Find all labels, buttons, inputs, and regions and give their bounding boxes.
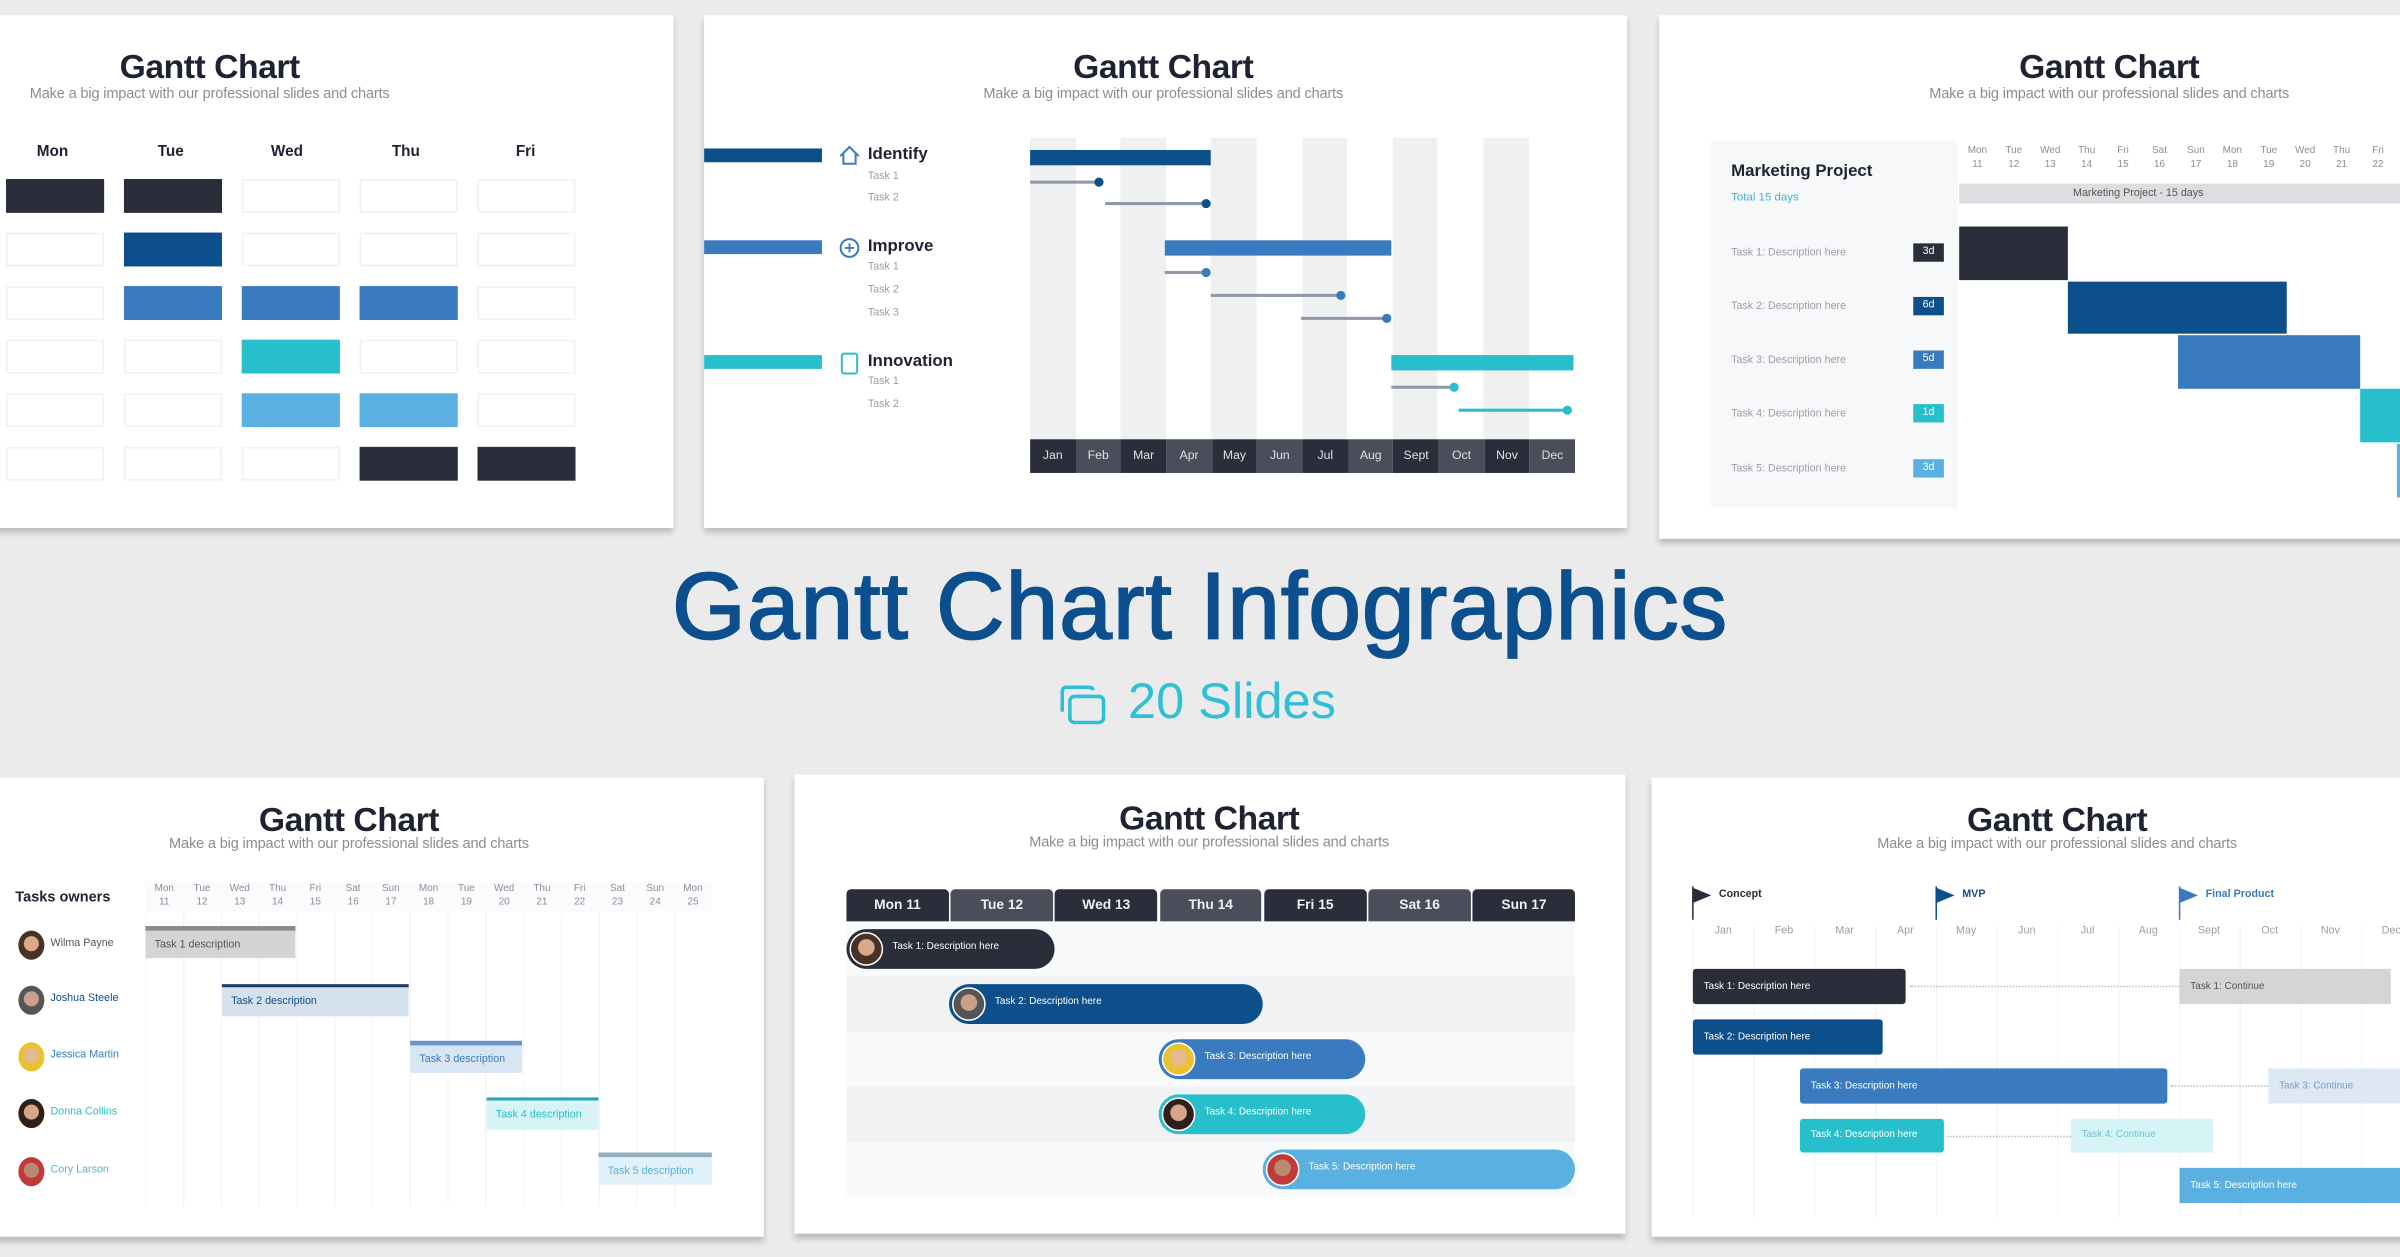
day grid: 12: [2008, 159, 2019, 170]
month axis: Apr: [1180, 448, 1199, 462]
panel: milestone gantt: [1652, 778, 2400, 1237]
timeline grid: 16: [348, 897, 359, 908]
icon: home: [840, 146, 860, 165]
pill bars: Task 5: Description here: [1309, 1162, 1415, 1172]
timeline grid: 21: [536, 897, 547, 908]
timeline grid: Sat: [610, 883, 625, 894]
day tabs: Thu 14: [1189, 897, 1233, 912]
panel: yearly gantt with milestones: [704, 15, 1627, 528]
months and bars: Task 3: Continue: [2279, 1081, 2353, 1091]
month axis: Dec: [1541, 448, 1563, 462]
icon: slides: [1060, 686, 1106, 724]
day tabs: [846, 889, 1575, 922]
timeline grid: Thu: [533, 883, 550, 894]
day grid: 14: [2081, 159, 2092, 170]
timeline grid: Task 3 description: [419, 1055, 505, 1065]
milestone flags: Concept: [1719, 889, 1762, 900]
subtitle: Make a big impact with our professional slides and charts: [169, 836, 529, 853]
pill bars: Task 3: Description here: [1205, 1052, 1311, 1062]
timeline grid: Tue: [458, 883, 475, 894]
day tabs: Fri 15: [1297, 897, 1334, 912]
month axis: Aug: [1360, 448, 1382, 462]
timeline grid: 25: [687, 897, 699, 908]
timeline grid: Fri: [574, 883, 585, 894]
day grid: 19: [2263, 159, 2274, 170]
months and bars: Task 4: Description here: [1811, 1130, 1917, 1140]
panel: marketing project gantt: [1659, 15, 2400, 539]
months and bars: Jun: [2018, 926, 2035, 937]
months and bars: Task 4: Continue: [2082, 1130, 2156, 1140]
owners column: Wilma Payne: [51, 938, 114, 949]
day grid: 13: [2045, 159, 2056, 170]
timeline grid: Wed: [230, 883, 250, 894]
months and bars: Task 3: Description here: [1811, 1081, 1917, 1091]
panel: pill gantt: [794, 774, 1626, 1234]
icon: plus circle: [840, 238, 860, 258]
timeline grid: 22: [574, 897, 585, 908]
day grid: Sun: [2187, 145, 2205, 156]
timeline grid: Sun: [646, 883, 664, 894]
timeline grid: [145, 882, 712, 1206]
timeline grid: 11: [159, 897, 169, 908]
bars: [1030, 150, 1211, 165]
day headers: Wed: [271, 144, 303, 161]
heading: Gantt Chart: [1073, 47, 1253, 86]
day grid: Wed: [2040, 145, 2060, 156]
category labels: Task 1: [868, 171, 899, 182]
day grid: Wed: [2295, 145, 2315, 156]
timeline grid: Sun: [382, 883, 400, 894]
day grid: 15: [2118, 159, 2129, 170]
timeline grid: 24: [650, 897, 661, 908]
months and bars: May: [1956, 926, 1976, 937]
day tabs: Tue 12: [981, 897, 1023, 912]
subtitle: Make a big impact with our professional slides and charts: [30, 86, 390, 103]
day grid: 11: [1972, 159, 1983, 170]
milestone flags: MVP: [1962, 889, 1985, 900]
timeline grid: Fri: [310, 883, 321, 894]
timeline grid: Task 4 description: [496, 1110, 582, 1120]
day grid: Marketing Project - 15 days: [2073, 188, 2203, 199]
day grid: Thu: [2078, 145, 2095, 156]
task list: 5d: [1923, 354, 1935, 364]
pill bars: Task 2: Description here: [995, 996, 1102, 1007]
category labels: Task 2: [868, 399, 899, 410]
task list: Marketing Project: [1731, 162, 1872, 181]
icon: phone: [840, 352, 858, 374]
months and bars: Task 5: Description here: [2190, 1180, 2297, 1191]
task list: 3d: [1923, 462, 1935, 473]
timeline grid: 14: [272, 897, 283, 908]
month axis: Mar: [1133, 448, 1154, 462]
day tabs: Sun 17: [1501, 897, 1547, 912]
timeline grid: Mon: [155, 883, 174, 894]
months and bars: Nov: [2321, 926, 2340, 937]
timeline grid: 19: [461, 897, 472, 908]
months and bars: Jul: [2081, 926, 2094, 937]
months and bars: Jan: [1715, 926, 1732, 937]
heading: Gantt Chart: [2019, 47, 2199, 86]
timeline grid: 15: [310, 897, 321, 908]
subtitle: Make a big impact with our professional slides and charts: [983, 86, 1343, 103]
pill bars: Task 4: Description here: [1205, 1107, 1311, 1117]
day grid: Mon: [1968, 145, 1987, 156]
months and bars: Feb: [1775, 926, 1793, 937]
chart: [1030, 138, 1575, 473]
timeline grid: 17: [385, 897, 396, 908]
category labels: Improve: [868, 237, 933, 256]
timeline grid: Mon: [683, 883, 703, 894]
owners column: Cory Larson: [51, 1165, 109, 1176]
day grid: 17: [2190, 159, 2201, 170]
month axis: Jan: [1043, 448, 1063, 462]
heading: Gantt Chart: [1967, 801, 2147, 839]
day grid: Thu: [2333, 145, 2350, 156]
months and bars: Task 1: Description here: [1704, 981, 1810, 992]
day grid: 16: [2154, 159, 2165, 170]
milestone flags: [1692, 886, 2274, 920]
pill bars: [846, 921, 1575, 1197]
month axis: Feb: [1088, 448, 1109, 462]
heading: Gantt Chart: [120, 47, 300, 86]
owners column: Jessica Martin: [51, 1050, 119, 1061]
title: Gantt Chart Infographics: [672, 554, 1728, 660]
day headers: [37, 144, 535, 161]
panel: task owners gantt: [0, 778, 764, 1237]
timeline grid: Tue: [194, 883, 210, 894]
timeline grid: Thu: [269, 883, 286, 894]
timeline grid: 12: [197, 897, 208, 908]
category labels: [840, 145, 953, 410]
day tabs: Mon 11: [874, 897, 921, 912]
timeline grid: Sat: [346, 883, 361, 894]
day tabs: Sat 16: [1399, 897, 1440, 912]
panel: weekly gantt: [0, 15, 673, 528]
day grid: Tue: [2260, 145, 2277, 156]
category labels: Identify: [868, 145, 928, 164]
timeline grid: 13: [234, 897, 245, 908]
month axis: Jul: [1317, 448, 1333, 462]
owners column: [15, 889, 119, 1186]
timeline grid: Task 5 description: [608, 1166, 693, 1177]
day grid: Mon: [2223, 145, 2242, 156]
task list: Task 1: Description here: [1731, 248, 1846, 259]
day grid: Fri: [2117, 145, 2129, 156]
day grid: 22: [2373, 159, 2384, 170]
timeline grid: Mon: [419, 883, 438, 894]
subtitle: Make a big impact with our professional slides and charts: [1877, 836, 2237, 853]
task list: Task 3: Description here: [1731, 355, 1846, 366]
day grid: 18: [2227, 159, 2238, 170]
day tabs: Wed 13: [1082, 897, 1130, 912]
subtitle: Make a big impact with our professional slides and charts: [1029, 834, 1389, 851]
task list: Task 4: Description here: [1731, 409, 1846, 419]
owners column: Tasks owners: [15, 889, 110, 906]
timeline grid: 23: [612, 897, 623, 908]
task list: 6d: [1923, 300, 1935, 311]
subtitle: slide count: 20 Slides: [1128, 672, 1336, 729]
task list: Task 5: Description here: [1731, 464, 1846, 474]
day grid: Tue: [2005, 145, 2022, 156]
category labels: Task 2: [868, 285, 899, 295]
month axis: Nov: [1496, 448, 1518, 462]
owners column: Joshua Steele: [51, 993, 118, 1004]
month axis: [1030, 439, 1575, 473]
timeline grid: 18: [423, 897, 434, 908]
heading: Gantt Chart: [1119, 799, 1299, 837]
day grid: Fri: [2372, 145, 2384, 156]
months and bars: Apr: [1897, 926, 1914, 937]
months and bars: [1693, 926, 2400, 1217]
month axis: Sept: [1404, 448, 1429, 462]
day headers: Fri: [516, 144, 535, 161]
owners column: Donna Collins: [51, 1107, 117, 1117]
left category bars: [704, 148, 822, 369]
day grid: [1959, 145, 2400, 498]
months and bars: Task 2: Description here: [1704, 1032, 1810, 1042]
month axis: May: [1223, 448, 1246, 462]
subtitle: Make a big impact with our professional slides and charts: [1929, 86, 2289, 103]
months and bars: Mar: [1835, 926, 1854, 937]
timeline grid: 20: [499, 897, 510, 908]
months and bars: Aug: [2139, 926, 2158, 937]
months and bars: Sept: [2198, 926, 2220, 937]
day grid: 21: [2336, 159, 2347, 170]
task list: 1d: [1923, 407, 1935, 418]
category labels: Innovation: [868, 352, 953, 370]
timeline grid: Task 1 description: [155, 940, 240, 951]
task list: Task 2: Description here: [1731, 302, 1846, 312]
heading: Gantt Chart: [259, 801, 439, 839]
category labels: Task 2: [868, 193, 899, 204]
day headers: Thu: [392, 144, 420, 161]
month axis: Jun: [1270, 448, 1290, 462]
day headers: Mon: [37, 144, 68, 161]
month axis: Oct: [1452, 448, 1471, 462]
category labels: Task 1: [868, 262, 899, 272]
task list: [1711, 141, 1958, 508]
timeline grid: Task 2 description: [231, 996, 317, 1007]
months and bars: Task 1: Continue: [2190, 981, 2264, 992]
cell grid: [6, 179, 576, 481]
day grid: Sat: [2152, 145, 2167, 156]
milestone flags: Final Product: [2206, 889, 2274, 900]
months and bars: Oct: [2261, 926, 2278, 937]
pill bars: Task 1: Description here: [892, 941, 999, 952]
timeline grid: Wed: [494, 883, 514, 894]
category labels: Task 3: [868, 308, 899, 318]
day headers: Tue: [158, 144, 184, 161]
category labels: Task 1: [868, 377, 899, 387]
day grid: 20: [2300, 159, 2311, 170]
task list: Total 15 days: [1731, 190, 1799, 204]
task list: 3d: [1923, 246, 1935, 257]
